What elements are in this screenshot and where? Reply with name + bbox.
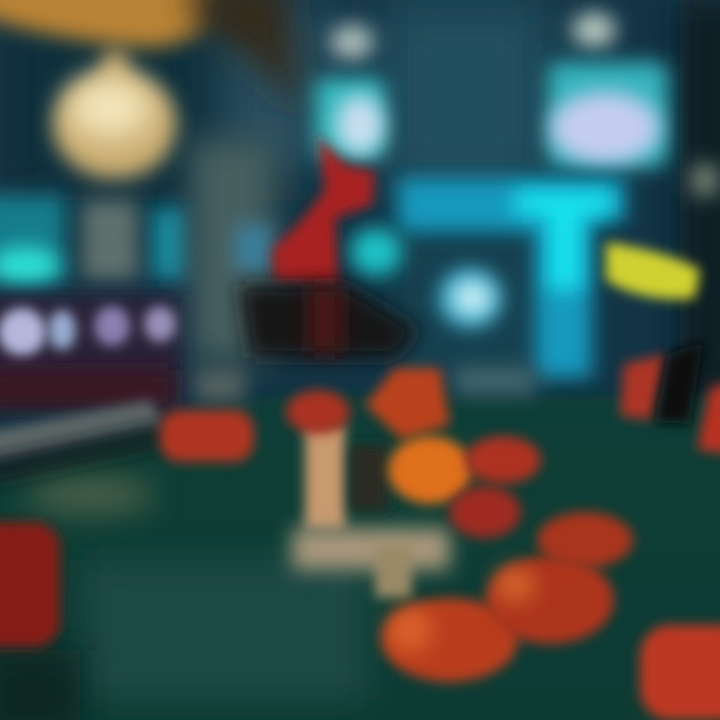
ceiling: golden canopy	[0, 0, 300, 110]
red chip stack bottom right	[640, 625, 720, 720]
slot machine row	[0, 295, 180, 410]
red chip stack bottom left	[0, 522, 60, 647]
left wall screens	[0, 140, 275, 360]
green felt table	[0, 395, 720, 720]
beige lattice	[292, 425, 450, 598]
red chip stack foreground	[382, 512, 633, 682]
cyan T-shaped sign	[398, 178, 625, 378]
chandelier	[53, 47, 177, 179]
red figure	[238, 135, 420, 358]
central red chips	[286, 368, 541, 538]
table edge	[0, 368, 535, 484]
red chip stack left	[160, 410, 254, 462]
ceiling lights	[330, 12, 720, 198]
red chips right edge	[620, 342, 720, 455]
yellow sign	[606, 242, 700, 299]
window right	[548, 62, 668, 167]
cyan glowing orbs	[350, 228, 502, 328]
window left	[315, 78, 385, 158]
